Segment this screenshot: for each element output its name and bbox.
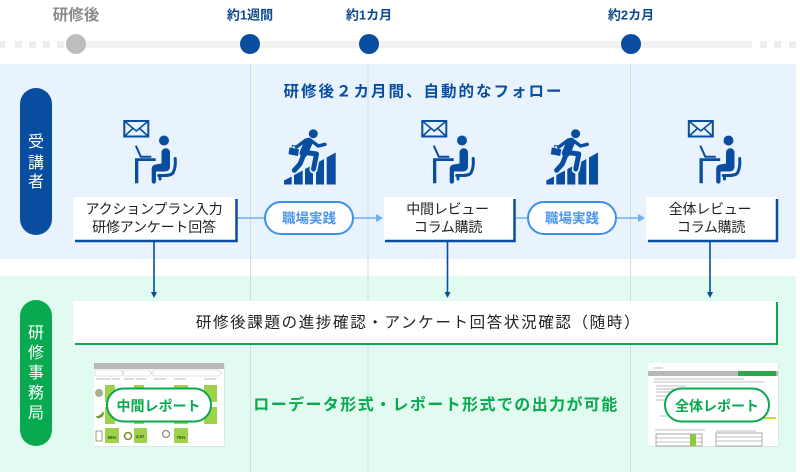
timeline point: 約2カ月: 約2カ月 <box>608 8 654 22</box>
icon: runner on stairs 2 <box>546 129 598 184</box>
box: 進捗確認 <box>73 301 777 344</box>
panel: 研修事務局 lane <box>0 276 796 472</box>
label pill: 受講者: 者 <box>28 173 44 191</box>
icon: person at desk with mail 2 <box>422 121 473 184</box>
panel: 受講者 lane <box>0 64 796 259</box>
box: 全体レビュー: コラム購読 <box>677 219 745 235</box>
thumbnail: 中間レポート: 75% <box>176 435 186 440</box>
label pill: 研修事務局: 研 <box>28 325 44 342</box>
arrow: box 2 to box 3 <box>515 214 645 222</box>
timeline point: 約1週間: 約1週間 <box>227 8 273 22</box>
icon: person at desk with mail 3 <box>689 121 740 184</box>
label pill: 研修事務局 <box>20 300 52 446</box>
heading: 自動的なフォロー: 研修後２カ月間、自動的なフォロー <box>283 82 564 100</box>
thumbnail: 全体レポート: 全体レポート <box>675 398 759 414</box>
arrow: down from box 1 <box>151 242 157 298</box>
pill: 職場実践 1: 職場実践 <box>282 210 336 226</box>
thumbnail: 全体レポート <box>648 363 779 447</box>
timeline point: 約2カ月 <box>608 8 654 54</box>
label pill: 研修事務局: 事 <box>28 364 44 382</box>
timeline track <box>0 41 796 48</box>
label pill: 研修事務局: 修 <box>28 344 44 362</box>
label pill: 研修事務局: 務 <box>28 384 44 402</box>
timeline point: 約1カ月: 約1カ月 <box>346 8 392 22</box>
thumbnail: 中間レポート: 中間レポート <box>116 398 200 414</box>
arrow: down from box 2 <box>444 242 450 298</box>
box: 進捗確認: 研修後課題の進捗確認・アンケート回答状況確認（随時） <box>196 314 641 332</box>
timeline point: 約1週間 <box>227 8 273 54</box>
box: 中間レビュー: コラム購読 <box>414 219 482 235</box>
thumbnail: 中間レポート: 4.57 <box>136 434 145 439</box>
pill: 職場実践 2 <box>528 202 616 234</box>
box: 全体レビュー <box>646 197 777 241</box>
icon: person at desk with mail 1 <box>124 121 175 184</box>
timeline point: 約1カ月 <box>346 8 392 54</box>
icon: runner on stairs 1 <box>284 129 336 184</box>
timeline point: 研修後: 研修後 <box>53 5 100 24</box>
label pill: 受講者: 講 <box>28 154 44 172</box>
box: 中間レビュー: 中間レビュー <box>406 201 489 217</box>
label pill: 受講者: 受 <box>28 133 44 151</box>
arrow: box 1 to box 2 <box>238 214 383 222</box>
pill: 職場実践 1 <box>265 202 353 234</box>
pill: 職場実践 2: 職場実践 <box>545 210 599 226</box>
box: 中間レビュー <box>384 197 514 241</box>
label pill: 受講者 <box>20 88 52 235</box>
box: アクションプラン入力 <box>73 197 236 241</box>
thumbnail: 中間レポート: 96% <box>107 435 117 440</box>
box: アクションプラン入力: アクションプラン入力 <box>86 201 222 217</box>
timeline point: 研修後 <box>53 5 100 54</box>
arrow: down from box 3 <box>707 242 713 298</box>
box: 全体レビュー: 全体レビュー <box>669 201 751 217</box>
box: アクションプラン入力: 研修アンケート回答 <box>92 219 216 235</box>
label pill: 研修事務局: 局 <box>28 405 44 422</box>
thumbnail: 中間レポート <box>94 363 225 447</box>
text: 出力形式: ローデータ形式・レポート形式での出力が可能 <box>253 395 619 414</box>
